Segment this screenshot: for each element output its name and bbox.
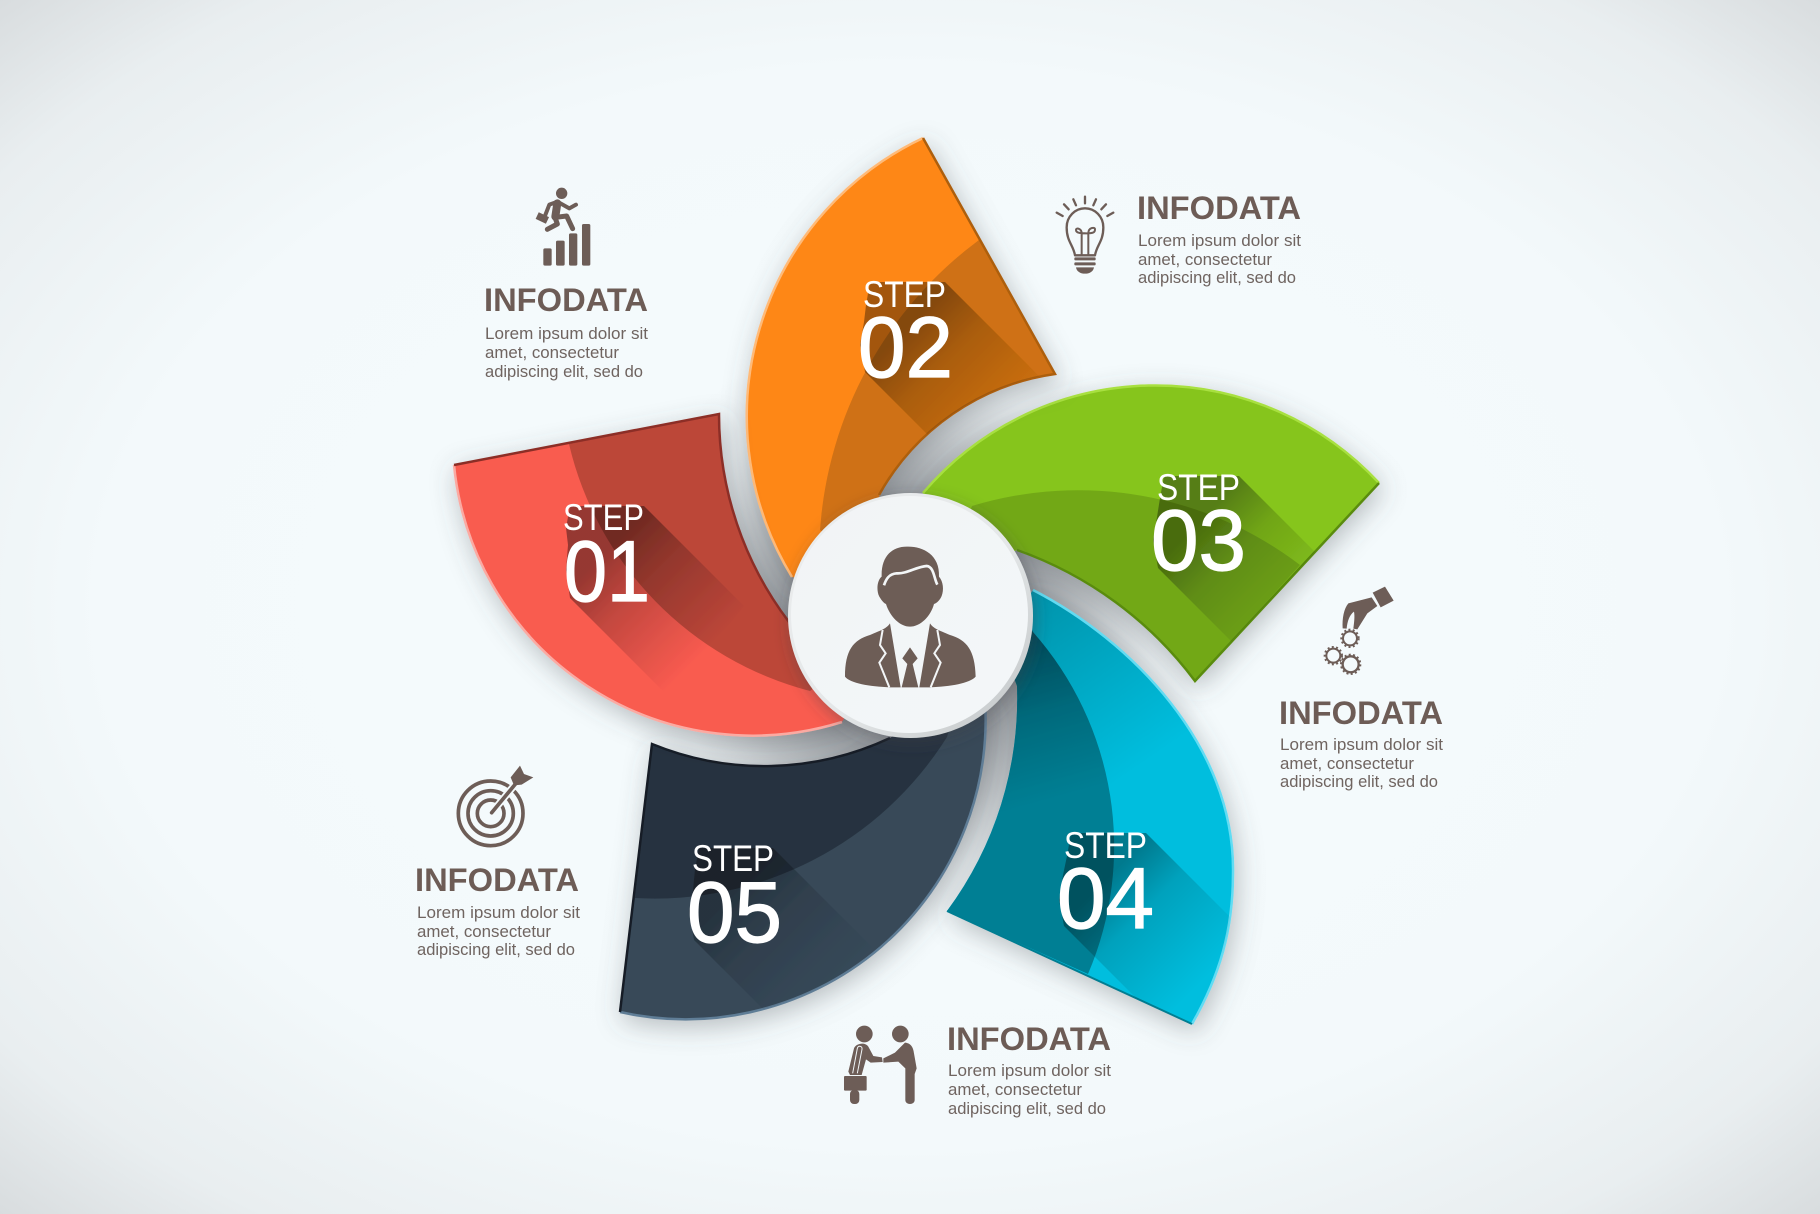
step 05 label: STEP xyxy=(692,838,774,879)
step 04 label: STEP xyxy=(1064,825,1147,866)
step 03 label: STEP xyxy=(1157,467,1240,508)
icon: handshake xyxy=(844,1026,917,1104)
info block 1: amet, consectetur xyxy=(485,343,619,362)
info block 4: INFODATA xyxy=(947,1021,1111,1057)
info block 3 xyxy=(1279,695,1443,791)
info block 1 xyxy=(484,282,648,381)
info block 4 xyxy=(947,1021,1111,1118)
step 01 label: 01 xyxy=(564,524,650,620)
info block 2 xyxy=(1137,190,1301,287)
info block 2: INFODATA xyxy=(1137,190,1301,226)
info block 3: INFODATA xyxy=(1279,695,1443,731)
icon: target with arrow xyxy=(458,766,533,846)
info block 3: amet, consectetur xyxy=(1280,754,1414,773)
petal: step 02 orange xyxy=(747,138,1055,600)
info block 2: amet, consectetur xyxy=(1138,250,1272,269)
info block 3: adipiscing elit, sed do xyxy=(1280,772,1438,791)
info block 5: adipiscing elit, sed do xyxy=(417,940,575,959)
info block 2: Lorem ipsum dolor sit xyxy=(1138,231,1301,250)
info block 1: adipiscing elit, sed do xyxy=(485,362,643,381)
icon: light bulb xyxy=(1057,197,1113,274)
info block 1: Lorem ipsum dolor sit xyxy=(485,324,648,343)
icon: businessman xyxy=(845,547,976,687)
step 02 label: STEP xyxy=(863,274,946,315)
petal: step 05 navy xyxy=(620,690,986,1040)
petal: step 03 green xyxy=(910,385,1379,681)
center circle xyxy=(788,493,1033,738)
info block 4: adipiscing elit, sed do xyxy=(948,1099,1106,1118)
step 01 label: STEP xyxy=(563,497,644,538)
info block 4: amet, consectetur xyxy=(948,1080,1082,1099)
info block 3: Lorem ipsum dolor sit xyxy=(1280,735,1443,754)
central shadow disc xyxy=(605,320,1215,930)
info block 4: Lorem ipsum dolor sit xyxy=(948,1061,1111,1080)
icon: hand with gears xyxy=(1325,587,1394,674)
info block 5: Lorem ipsum dolor sit xyxy=(417,903,580,922)
step 04 label: 04 xyxy=(1057,851,1154,947)
step 02 label: 02 xyxy=(858,300,953,396)
petal: step 04 blue xyxy=(947,590,1246,1026)
info block 1: INFODATA xyxy=(484,282,648,318)
icon: runner on bars xyxy=(536,188,590,266)
step 03 label: 03 xyxy=(1151,493,1246,589)
info block 5: amet, consectetur xyxy=(417,922,551,941)
info block 5 xyxy=(415,862,580,959)
step 05 label: 05 xyxy=(687,865,782,961)
info block 5: INFODATA xyxy=(415,862,579,898)
info block 2: adipiscing elit, sed do xyxy=(1138,268,1296,287)
petal: step 01 red xyxy=(454,414,900,736)
